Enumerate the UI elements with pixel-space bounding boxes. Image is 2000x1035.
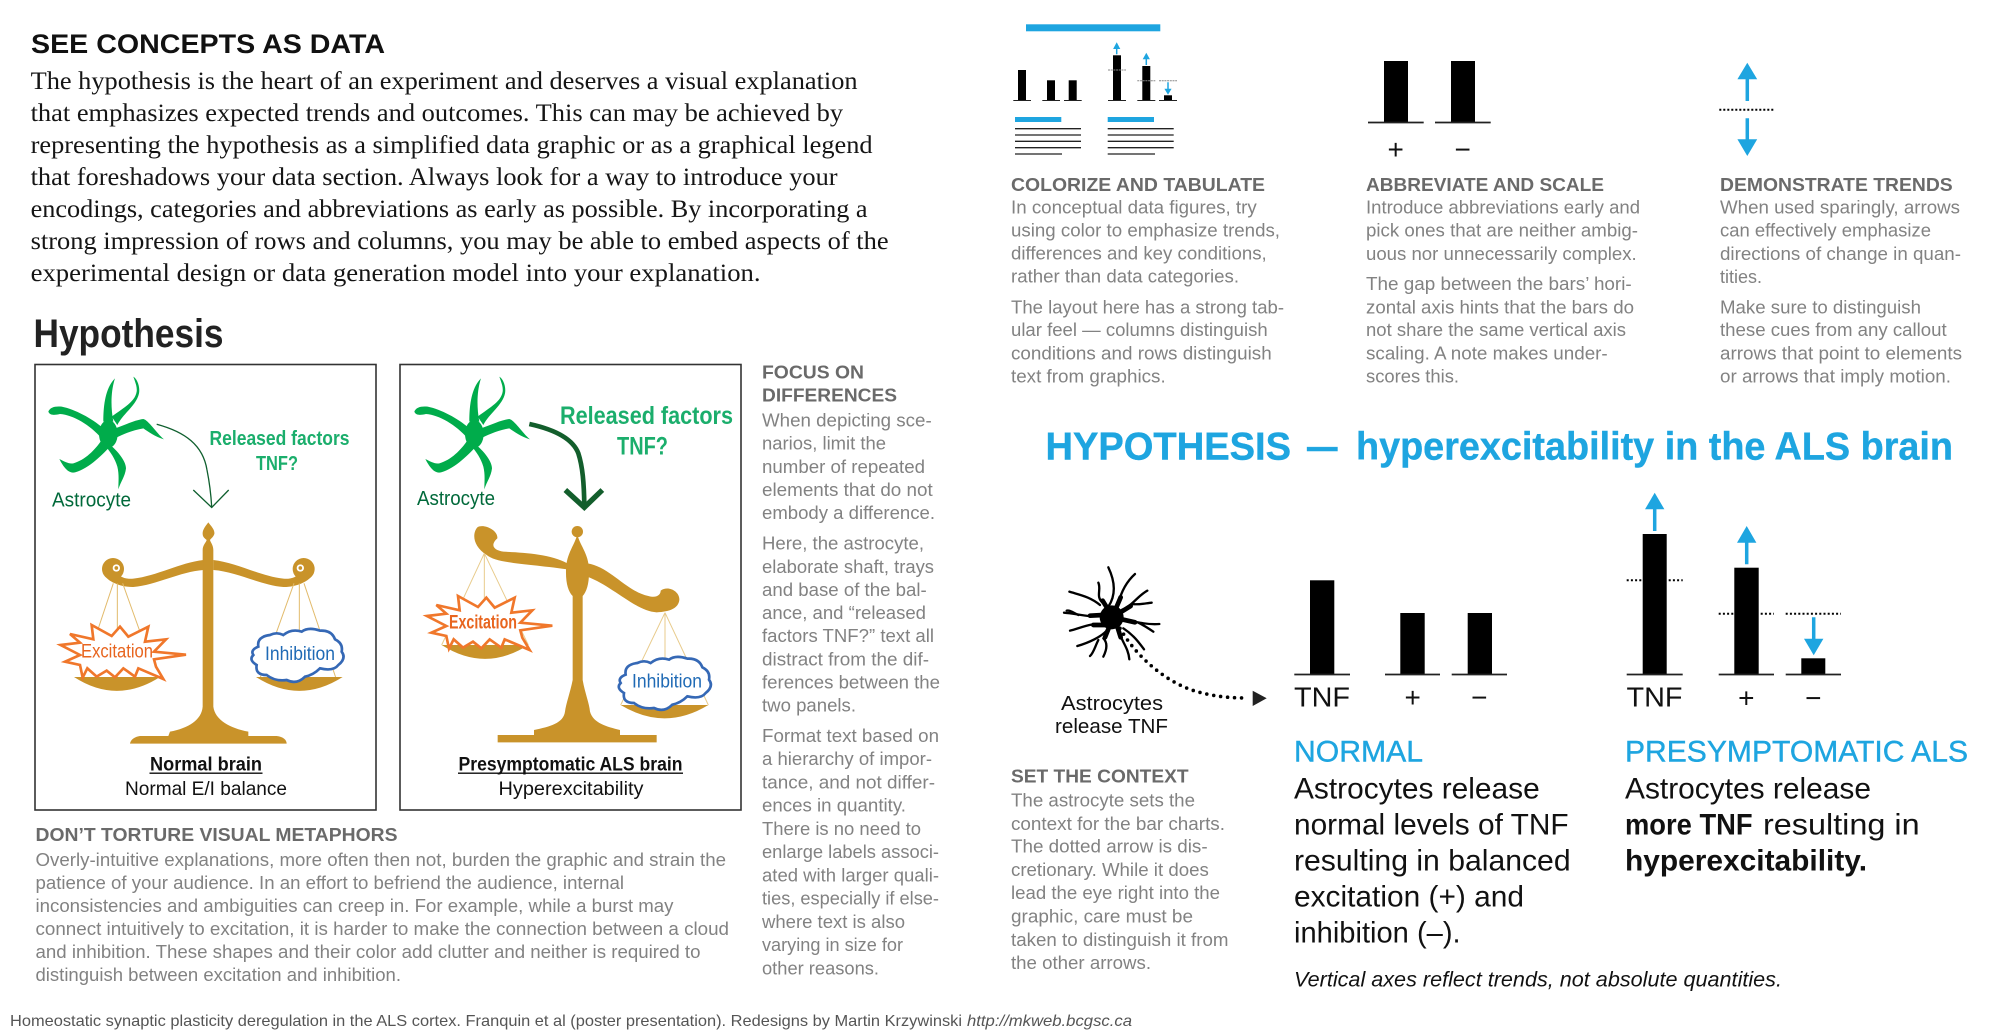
text block: normal: Astrocytes release — [1294, 772, 1540, 805]
text block: colorize and tabulate: In conceptual data figures, try — [1011, 197, 1257, 217]
text block: set the context: graphic, care must be — [1011, 907, 1193, 927]
text block: colorize and tabulate: rather than data categories. — [1011, 267, 1239, 287]
text block: focus on differences: ferences between the — [762, 672, 940, 692]
text block: colorize and tabulate: COLORIZE AND TABULATE — [1011, 174, 1265, 195]
text block: focus on differences: other reasons. — [762, 958, 879, 978]
label: released factors: Released factors — [560, 402, 733, 430]
text block: abbreviate and scale — [1366, 174, 1640, 387]
text block: demonstrate trends: or arrows that imply motion. — [1720, 367, 1951, 387]
text block: normal: resulting in balanced — [1294, 845, 1571, 878]
cloud shape — [619, 657, 711, 710]
label: released factors — [560, 402, 733, 460]
text block: focus on differences: and base of the bal- — [762, 580, 927, 600]
text block: focus on differences: ences in quantity. — [762, 796, 906, 816]
label: released factors: Released factors — [210, 428, 350, 450]
mini graphic: demonstrate trends arrows — [1719, 63, 1775, 156]
text block: normal: NORMAL — [1294, 736, 1423, 769]
text block: don't torture visual metaphors: and inhibition. These shapes and their color add clutter and neither is required to — [36, 942, 700, 962]
caption: normal brain: Normal brain — [150, 754, 262, 776]
text block: demonstrate trends: directions of change in quan- — [1720, 244, 1961, 264]
text block: focus on differences: When depicting sce- — [762, 410, 932, 430]
text block: focus on differences: FOCUS ON — [762, 362, 864, 382]
caption: presymptomatic: Hyperexcitability — [498, 778, 644, 800]
text block: abbreviate and scale: pick ones that are neither ambig- — [1366, 221, 1638, 241]
text block: normal: normal levels of TNF — [1294, 808, 1569, 841]
intro paragraph: that foreshadows your data section. Always look for a way to introduce your — [31, 164, 838, 191]
text block: focus on differences: two panels. — [762, 696, 856, 716]
text block: don't torture visual metaphors: DON’T TORTURE VISUAL METAPHORS — [36, 824, 398, 845]
text block: presymptomatic ALS: resulting in — [1763, 808, 1920, 841]
text block: set the context: cretionary. While it does — [1011, 860, 1209, 880]
icon: green astrocyte — [48, 377, 164, 489]
mini bar chart: normal — [1013, 70, 1082, 100]
label: excitation: Excitation — [81, 642, 153, 662]
cloud shape — [251, 629, 344, 682]
mini graphic: colorize and tabulate — [1013, 24, 1177, 154]
label: released factors: TNF? — [617, 432, 668, 460]
text block: don't torture visual metaphors: connect intuitively to excitation, it is harder to make the connection between a cloud — [36, 919, 729, 939]
text block: set the context: The astrocyte sets the — [1011, 791, 1195, 811]
text block: focus on differences — [761, 362, 940, 978]
text block: focus on differences: a hierarchy of impor- — [762, 749, 932, 769]
text block: colorize and tabulate: The layout here has a strong tab- — [1011, 297, 1284, 317]
icon: green astrocyte — [414, 377, 530, 489]
intro paragraph: strong impression of rows and columns, you may be able to embed aspects of the — [31, 228, 889, 255]
text block: abbreviate and scale: zontal axis hints that the bars do — [1366, 297, 1634, 317]
caption: normal brain: Normal E/I balance — [125, 778, 287, 800]
label: astrocyte: Astrocyte — [52, 490, 131, 512]
label: released factors: TNF? — [256, 453, 298, 475]
text block: focus on differences: ties, especially if else- — [762, 889, 939, 909]
title: hypothesis, hyperexcitability in the ALS brain: — — [1307, 426, 1338, 468]
text block: focus on differences: Here, the astrocyte, — [762, 534, 924, 554]
text block: abbreviate and scale: Introduce abbreviations early and — [1366, 197, 1640, 217]
text block: colorize and tabulate: using color to emphasize trends, — [1011, 221, 1280, 241]
label: astrocytes release TNF — [1055, 693, 1168, 738]
text block: abbreviate and scale: The gap between the bars’ hori- — [1366, 274, 1632, 294]
text block: focus on differences: Format text based on — [762, 726, 939, 746]
bar chart: normal — [1294, 580, 1507, 713]
text block: set the context — [1011, 766, 1228, 973]
panel: presymptomatic ALS brain — [400, 364, 741, 810]
text block: focus on differences: tance, and not differ- — [762, 772, 935, 792]
text block: focus on differences: enlarge labels associ- — [762, 842, 939, 862]
text block: colorize and tabulate: conditions and rows distinguish — [1011, 343, 1272, 363]
text block: presymptomatic ALS: more TNF — [1625, 808, 1753, 841]
text block: abbreviate and scale: uous nor unnecessarily complex. — [1366, 244, 1637, 264]
text block: focus on differences: number of repeated — [762, 457, 925, 477]
text block: normal — [1294, 736, 1571, 950]
caption: normal brain — [125, 754, 287, 800]
label: excitation: Excitation — [449, 612, 517, 634]
text block: focus on differences: where text is also — [761, 912, 905, 932]
plus label: + — [1388, 134, 1404, 165]
text block: demonstrate trends: DEMONSTRATE TRENDS — [1720, 174, 1953, 195]
text block: set the context: context for the bar charts. — [1011, 814, 1225, 834]
intro paragraph: that emphasizes expected trends and outcomes. This can may be achieved by — [31, 100, 844, 127]
burst shape — [61, 625, 186, 679]
label: inhibition: Inhibition — [265, 644, 335, 665]
heading: hypothesis: Hypothesis — [34, 312, 224, 356]
text block: abbreviate and scale: scaling. A note makes under- — [1366, 343, 1608, 363]
text block: focus on differences: DIFFERENCES — [762, 384, 897, 406]
minus label: − — [1455, 134, 1471, 165]
intro paragraph: The hypothesis is the heart of an experiment and deserves a visual explanation — [31, 68, 858, 95]
text block: abbreviate and scale: ABBREVIATE AND SCALE — [1366, 174, 1604, 195]
axis label: plus: + — [1738, 682, 1754, 714]
intro paragraph: experimental design or data generation model into your explanation. — [31, 260, 761, 287]
text block: presymptomatic ALS — [1625, 736, 1968, 878]
text block: demonstrate trends: can effectively emphasize — [1720, 221, 1931, 241]
text block: focus on differences: There is no need to — [762, 819, 921, 839]
arrow: thin release arrow — [157, 424, 229, 508]
text block: set the context: SET THE CONTEXT — [1011, 766, 1189, 787]
caption: presymptomatic — [458, 754, 683, 800]
text block: set the context: The dotted arrow is dis- — [1011, 837, 1208, 857]
text block: colorize and tabulate: ular feel — columns distinguish — [1011, 320, 1268, 340]
text block: focus on differences: factors TNF?” text all — [762, 626, 934, 646]
mini bar chart: presymptomatic — [1108, 42, 1177, 100]
text block: set the context: the other arrows. — [1011, 953, 1151, 973]
axis label: plus: + — [1405, 682, 1421, 713]
text block: focus on differences: narios, limit the — [762, 434, 886, 454]
title: hypothesis, hyperexcitability in the ALS brain — [1046, 426, 1953, 468]
intro paragraph: encodings, categories and abbreviations as early as possible. By incorporating a — [31, 196, 868, 223]
text block: set the context: lead the eye right into the — [1011, 883, 1220, 903]
balance scale: equal — [61, 522, 344, 744]
text block: set the context: taken to distinguish it from — [1011, 930, 1228, 950]
caption: presymptomatic: Presymptomatic ALS brain — [458, 754, 682, 776]
text block: demonstrate trends: tities. — [1720, 267, 1762, 287]
text block: focus on differences: varying in size for — [762, 935, 903, 955]
mini graphic: abbreviate and scale — [1368, 61, 1491, 165]
text block: demonstrate trends: arrows that point to elements — [1720, 343, 1962, 363]
text block: focus on differences: embody a difference. — [762, 503, 935, 523]
axis label: TNF: TNF — [1626, 682, 1682, 713]
arrows: up and down trends — [1645, 493, 1823, 655]
text block: abbreviate and scale: not share the same vertical axis — [1366, 320, 1626, 340]
intro paragraph — [31, 68, 889, 287]
text block: abbreviate and scale: scores this. — [1366, 367, 1459, 387]
label: inhibition: Inhibition — [632, 672, 702, 692]
arrow: dotted astrocyte to chart — [1120, 628, 1267, 706]
text block: demonstrate trends — [1720, 174, 1962, 387]
balance scale: tipped, with thick arrow — [427, 424, 711, 742]
intro paragraph: representing the hypothesis as a simplified data graphic or as a graphical legend — [31, 132, 873, 159]
burst shape — [427, 596, 552, 650]
text block: don't torture visual metaphors: patience of your audience. In an effort to befriend the audience, internal — [36, 873, 624, 893]
text block: focus on differences: ated with larger quali- — [762, 866, 939, 886]
text block: focus on differences: ance, and “released — [762, 603, 926, 623]
axis label: minus: − — [1805, 682, 1821, 714]
bar chart: presymptomatic ALS — [1626, 493, 1841, 714]
text block: normal: excitation (+) and — [1294, 881, 1524, 914]
label: astrocytes release TNF: release TNF — [1055, 716, 1168, 738]
text block: focus on differences: elements that do not — [762, 480, 933, 500]
arrow: thick release arrow — [529, 424, 602, 507]
footer credit: Homeostatic synaptic plasticity deregulation in the ALS cortex. Franquin et al (poster presentation). Redesigns by Martin Krzywinski — [10, 1013, 962, 1030]
label: released factors — [210, 428, 350, 475]
text block: don't torture visual metaphors — [36, 824, 729, 985]
heading: see concepts as data: SEE CONCEPTS AS DATA — [31, 29, 385, 59]
text block: demonstrate trends: these cues from any callout — [1720, 320, 1947, 340]
title: hypothesis, hyperexcitability in the ALS brain: HYPOTHESIS — [1046, 426, 1291, 468]
note: vertical axes: Vertical axes reflect trends, not absolute quantities. — [1294, 969, 1782, 992]
label: astrocyte: Astrocyte — [417, 488, 495, 510]
text block: demonstrate trends: Make sure to distinguish — [1720, 297, 1921, 317]
panel: normal brain — [35, 364, 376, 810]
text block: demonstrate trends: When used sparingly, arrows — [1720, 197, 1960, 217]
axis label: TNF: TNF — [1294, 681, 1350, 712]
label: astrocytes release TNF: Astrocytes — [1061, 693, 1163, 715]
text block: presymptomatic ALS: PRESYMPTOMATIC ALS — [1625, 736, 1968, 769]
text block: colorize and tabulate: text from graphics. — [1011, 367, 1166, 387]
text block: normal: inhibition (–). — [1294, 917, 1461, 950]
text block: presymptomatic ALS: Astrocytes release — [1625, 772, 1871, 805]
text block: don't torture visual metaphors: distinguish between excitation and inhibition. — [36, 965, 401, 985]
text block: colorize and tabulate — [1011, 174, 1284, 387]
title: hypothesis, hyperexcitability in the ALS brain: hyperexcitability in the ALS brain — [1356, 426, 1953, 468]
text block: don't torture visual metaphors: inconsistencies and ambiguities can creep in. For example, while a burst may — [36, 896, 674, 916]
text block: colorize and tabulate: differences and key conditions, — [1011, 243, 1267, 263]
text block: don't torture visual metaphors: Overly-intuitive explanations, more often then not, burden the graphic and strain the — [36, 850, 726, 870]
footer credit: http://mkweb.bcgsc.ca — [967, 1013, 1132, 1030]
icon: black astrocyte — [1064, 567, 1159, 659]
text block: focus on differences: elaborate shaft, trays — [762, 557, 934, 577]
axis label: minus: − — [1471, 682, 1487, 713]
text block: focus on differences: distract from the dif- — [762, 649, 929, 669]
text block: presymptomatic ALS: hyperexcitability. — [1625, 845, 1867, 878]
